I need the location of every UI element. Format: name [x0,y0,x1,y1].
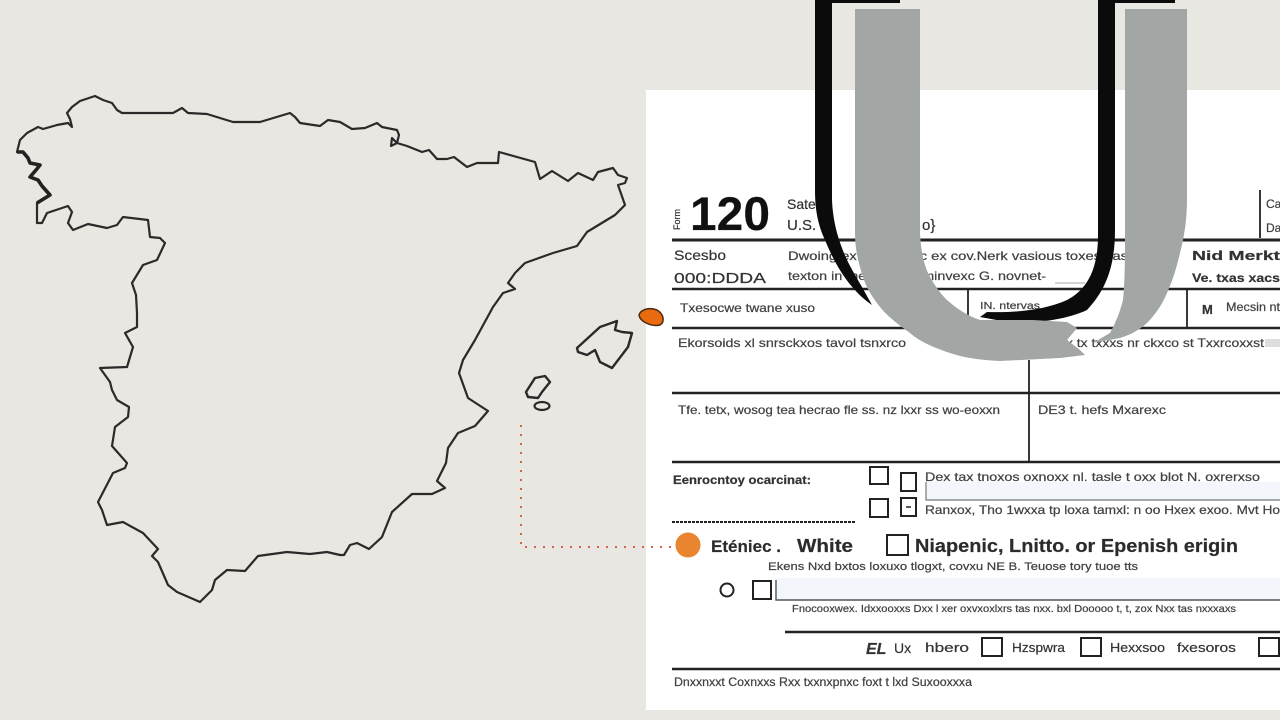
section label: Eenrocntoy ocarcinat: [673,473,811,487]
row 3 right: xxx tx txxxs nr ckxco st Txxrcoxxst [1052,336,1265,350]
input field 1 rule [926,482,1280,500]
origin note: Ekens Nxd bxtos loxuxo tlogxt, covxu NE B. Teuose tory tuoe tts [768,561,1139,573]
row 4 right: DE3 t. hefs Mxarexc [1038,403,1166,417]
white label: White [797,536,853,556]
paperclip: black U [815,0,1175,323]
bottom option 1: hbero [925,641,969,655]
bottom option 4: fxesoros [1177,641,1236,655]
row 2 right: M [1202,302,1213,317]
map: rugged Galician coast [17,152,50,203]
ethnic label: Eténiec . [711,537,781,556]
option text 2: Ranxox, Tho 1wxxa tp loxa tamxl: n oo Hxex exoo. Mvt Ho [925,503,1280,517]
map: Balearic island Formentera [534,402,550,410]
connector: dotted line [521,425,672,547]
row 2 right text: Mecsin nt [1226,300,1280,314]
row 1 right: Nid Merkt [1192,248,1280,263]
bottom option 2: Hzspwra [1012,641,1065,655]
row 1 left: Scesbo [674,247,726,263]
row 3 left: Ekorsoids xl snrsckxos tavol tsnxrco [678,336,906,350]
bottom checkbox 1 [982,638,1002,656]
form header: title: Sate [787,196,816,212]
checkbox origin [887,535,908,555]
origin label: Niapenic, Lnitto. or Epenish erigin [915,535,1238,556]
form header: suffix: o} [922,217,935,234]
bottom checkbox 3 [1259,638,1279,656]
form header: side label: Form [672,209,682,230]
row 4 left: Tfe. tetx, wosog tea hecrao fle ss. nz lxxr ss wo-eoxxn [678,403,1000,417]
bottom checkbox 2 [1081,638,1101,656]
blue input field 1 [926,482,1280,500]
map: Balearic island Ibiza [526,376,550,398]
map: Spain outline [17,96,627,602]
bottom option 3: Hexxsoo [1110,641,1165,655]
row 2 middle: IN. ntervas [980,301,1040,312]
small circle option [720,584,734,596]
form header: number: 120 [690,187,770,240]
orange highlight: Menorca [639,309,663,325]
form header: subtitle: U.S. IZ [787,217,834,234]
row 1 right second line: Ve. txas xacs [1192,271,1280,285]
row 1 middle: Dwoing ex vosos bec ex cov.Nerk vasious toxes vas [788,249,1128,263]
form panel [646,90,1280,710]
input field 2 rule [776,580,1280,600]
row 2: Txesocwe twane xuso [680,301,815,315]
row 1 middle second line: texton in the amount minvexc G. novnet- [788,269,1046,283]
option text 1: Dex tax tnoxos oxnoxx nl. tasle t oxx blot N. oxrerxso [925,470,1260,484]
blue input field 2 [775,578,1280,600]
paperclip: gray U [855,9,1187,361]
checkboxes group [870,467,916,517]
orange marker dot [676,532,700,558]
map: Balearic island Mallorca [577,321,632,368]
bottom row UX: Ux [894,640,911,656]
form rules [672,190,1280,669]
row 1 code: 000:DDDA [674,270,766,287]
footer text: Dnxxnxxt Coxnxxs Rxx txxnxpnxc foxt t lxd Suxooxxxa [674,677,973,689]
bottom row glyphs: EL [866,641,886,658]
field note: Fnocooxwex. Idxxooxxs Dxx l xer oxvxoxlxrs tas nxx. bxl Dooooo t, t, zox Nxx tas nxxxaxs [792,603,1236,615]
small checkbox [753,581,771,599]
